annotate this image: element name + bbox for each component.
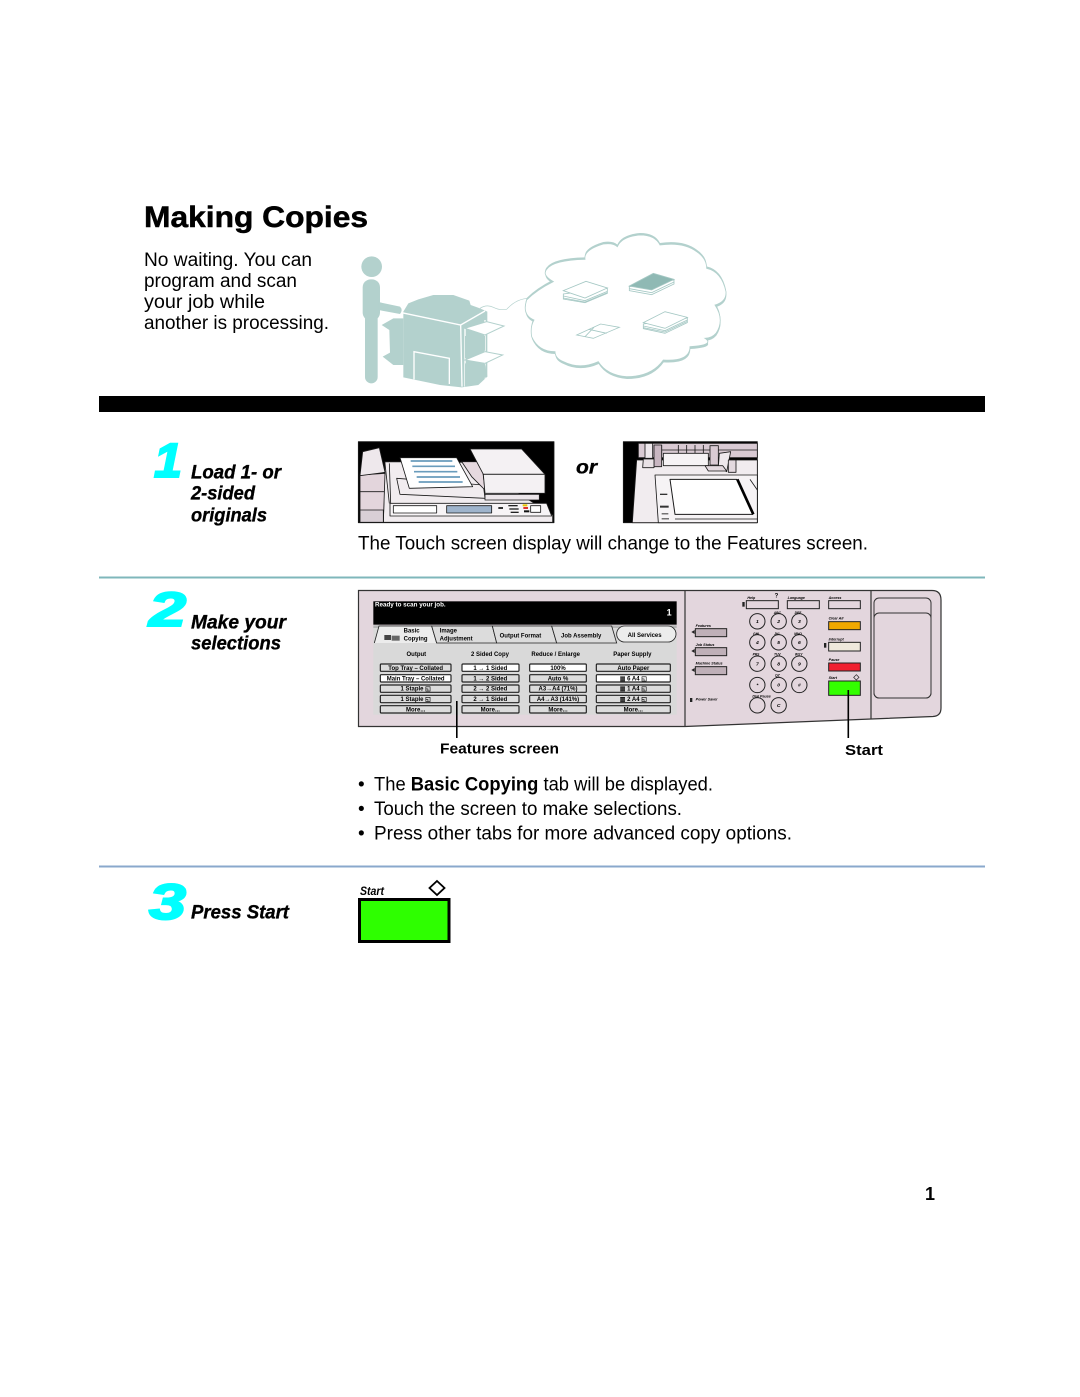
function keys: Access bbox=[828, 596, 841, 600]
illustration: document glass bbox=[623, 442, 757, 523]
illustration: person at copier with thought cloud bbox=[361, 233, 726, 387]
leader line: features screen bbox=[456, 701, 458, 738]
function keys: Language bbox=[788, 596, 805, 600]
function keys: Start bbox=[829, 676, 838, 680]
function keys: Interrupt bbox=[829, 637, 844, 641]
touch screen: More... bbox=[406, 707, 426, 713]
touch screen: A4→A3 (141%) bbox=[537, 697, 579, 703]
function keys: 4 bbox=[755, 640, 759, 646]
start button bbox=[360, 881, 449, 942]
step 1 caption: The Touch screen display will change to the Features screen. bbox=[358, 534, 868, 554]
leader line: start bbox=[848, 690, 849, 738]
page number: 1 bbox=[925, 1184, 935, 1204]
message bar: Ready to scan your job. bbox=[375, 603, 446, 609]
title: Making Copies bbox=[144, 201, 368, 234]
function keys: MNO bbox=[794, 632, 802, 636]
message bar bbox=[373, 601, 677, 625]
tabs bbox=[373, 625, 677, 644]
step 3 heading: Press Start bbox=[191, 902, 290, 924]
column headings: Output bbox=[407, 652, 426, 658]
function keys: C bbox=[777, 703, 781, 709]
touch screen: Top Tray – Collated bbox=[388, 666, 443, 672]
touch screen: ▥ 1 A4 ◱ bbox=[620, 687, 647, 693]
touch screen: Auto % bbox=[548, 676, 569, 682]
step 1 heading bbox=[190, 462, 283, 526]
bullet list: • bbox=[358, 824, 365, 844]
step 3 number: 3 bbox=[149, 875, 186, 930]
function keys: WXY bbox=[795, 653, 803, 657]
icon: thought cloud bbox=[525, 233, 726, 379]
function keys: Job Status bbox=[696, 643, 714, 647]
connector line bbox=[480, 298, 529, 310]
touch screen: Adjustment bbox=[440, 637, 473, 643]
touch screen: Basic bbox=[404, 629, 420, 635]
function keys: Clear All bbox=[829, 617, 844, 621]
icon: folded sheet bbox=[577, 324, 619, 338]
touch screen: A3→A4 (71%) bbox=[539, 687, 577, 693]
function keys bbox=[690, 593, 860, 713]
function keys: Dial Pause bbox=[752, 694, 771, 698]
function keys: 9 bbox=[798, 661, 801, 667]
function keys: 7 bbox=[756, 661, 759, 667]
touch screen: Image bbox=[440, 629, 458, 635]
intro text: No waiting. You can bbox=[144, 250, 312, 271]
function keys: Power Saver bbox=[696, 698, 718, 702]
function keys: Features bbox=[696, 624, 711, 628]
intro text: your job while bbox=[144, 292, 265, 313]
function keys: 0 bbox=[777, 683, 780, 689]
function keys: ABC bbox=[773, 611, 782, 615]
keypad bbox=[750, 614, 807, 713]
message bar: 1 bbox=[667, 607, 672, 617]
touch screen: 2 → 1 Sided bbox=[473, 697, 508, 703]
step 2 number: 2 bbox=[148, 583, 186, 637]
function keys: 3 bbox=[798, 619, 801, 625]
touch screen: Output Format bbox=[500, 634, 541, 640]
function keys: * bbox=[756, 683, 759, 689]
divider bbox=[99, 576, 985, 578]
touch screen: 1 Staple ◱ bbox=[401, 697, 431, 703]
paper tray flap bbox=[874, 598, 931, 698]
function keys: Pause bbox=[829, 658, 839, 662]
touch screen: All Services bbox=[628, 633, 662, 639]
touch screen: 1 → 1 Sided bbox=[473, 666, 508, 672]
icon: plain stack bbox=[643, 312, 687, 333]
function keys: 1 bbox=[756, 619, 759, 625]
bullet list bbox=[358, 774, 792, 844]
function keys: PRS bbox=[753, 653, 760, 657]
function keys: JKL bbox=[774, 632, 780, 636]
step 2 heading bbox=[191, 612, 288, 654]
label: features screen: Features screen bbox=[440, 740, 559, 758]
touch screen: Main Tray – Collated bbox=[387, 676, 445, 682]
intro text: program and scan bbox=[144, 271, 297, 292]
column headings: Paper Supply bbox=[613, 652, 652, 658]
function keys: # bbox=[798, 683, 801, 689]
icon: dark stack bbox=[629, 273, 674, 295]
column headings bbox=[407, 652, 652, 658]
illustration: document feeder bbox=[358, 442, 554, 523]
function keys: Help bbox=[747, 596, 756, 600]
column headings: Reduce / Enlarge bbox=[531, 652, 581, 658]
function keys: 6 bbox=[798, 640, 801, 646]
touch screen: Auto Paper bbox=[617, 666, 650, 672]
bullet list: Press other tabs for more advanced copy options. bbox=[374, 824, 792, 844]
touch screen: 2 → 2 Sided bbox=[473, 687, 508, 693]
black header bar bbox=[99, 396, 985, 412]
step 1 heading: Load 1- or bbox=[191, 462, 283, 484]
step 1 heading: originals bbox=[191, 506, 267, 526]
label: start: Start bbox=[845, 742, 883, 759]
start button: Start bbox=[360, 886, 385, 898]
function keys: 2 bbox=[776, 619, 780, 625]
touch screen: More... bbox=[481, 707, 500, 713]
bullet list: The Basic Copying tab will be displayed. bbox=[374, 774, 713, 796]
divider bbox=[99, 866, 985, 868]
icon: stapled stack bbox=[563, 281, 607, 303]
touch screen bbox=[373, 601, 677, 715]
function keys: Machine Status bbox=[696, 662, 722, 666]
touch screen: More... bbox=[548, 707, 568, 713]
step 2 heading: Make your bbox=[191, 612, 288, 634]
touch screen: ▥ 6 A4 ◱ bbox=[620, 676, 647, 682]
bullet list: • bbox=[358, 774, 365, 796]
function keys: QZ bbox=[775, 674, 781, 678]
function keys: ? bbox=[775, 593, 779, 599]
icon: copier bbox=[382, 295, 504, 387]
step 1 number: 1 bbox=[154, 434, 182, 488]
step 1 heading: 2-sided bbox=[190, 484, 255, 504]
buttons: output bbox=[380, 664, 670, 713]
step 2 heading: selections bbox=[191, 634, 281, 654]
intro text: another is processing. bbox=[144, 313, 329, 334]
or label: or bbox=[576, 458, 599, 478]
column headings: 2 Sided Copy bbox=[471, 652, 510, 658]
icon: person bbox=[361, 256, 402, 383]
function keys: 8 bbox=[777, 661, 780, 667]
touch screen: Job Assembly bbox=[561, 634, 602, 640]
touch screen: Copying bbox=[404, 637, 428, 643]
touch screen: More... bbox=[624, 707, 643, 713]
bullet list: • bbox=[358, 799, 365, 820]
intro text bbox=[144, 250, 329, 334]
function keys: GHI bbox=[753, 632, 759, 636]
touch screen: 1 → 2 Sided bbox=[473, 676, 508, 682]
function keys: DEF bbox=[795, 611, 802, 615]
touch screen: 100% bbox=[550, 666, 566, 672]
function keys: 5 bbox=[777, 640, 780, 646]
panel body bbox=[358, 590, 941, 726]
control panel bbox=[358, 590, 941, 738]
touch screen: 1 Staple ◱ bbox=[401, 687, 431, 693]
touch screen: ▥ 2 A4 ◱ bbox=[620, 697, 647, 703]
bullet list: Touch the screen to make selections. bbox=[374, 799, 682, 820]
function keys: TUV bbox=[774, 653, 781, 657]
